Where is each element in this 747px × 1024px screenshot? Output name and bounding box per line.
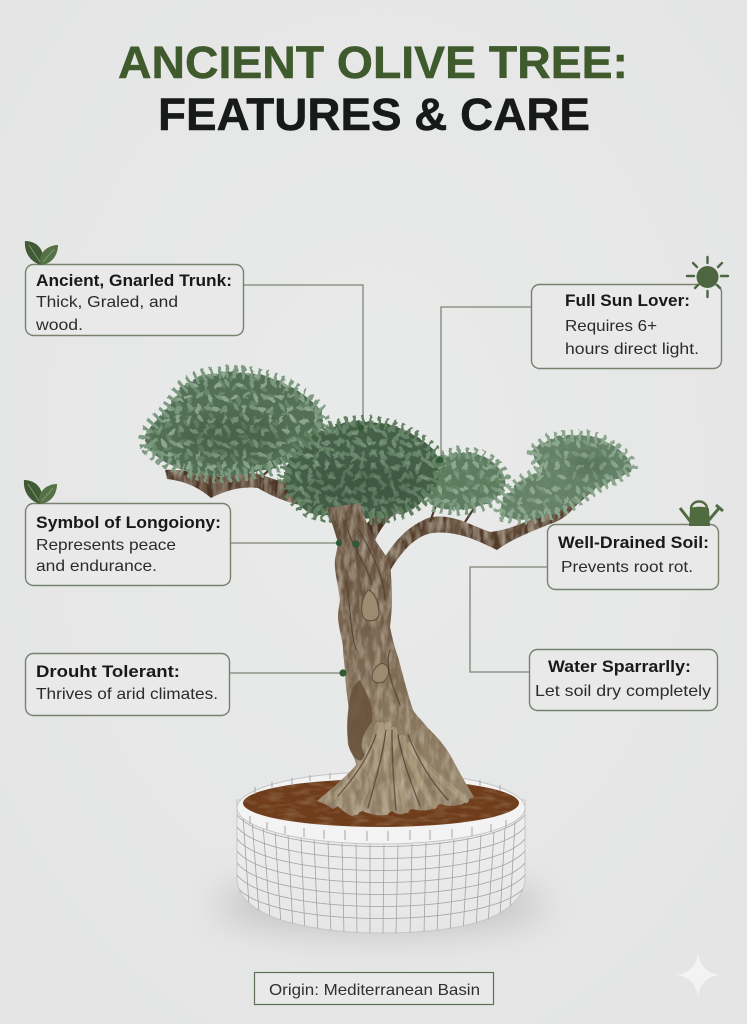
callout: water sparingly	[530, 650, 718, 710]
title: FEATURES & CARE	[158, 89, 590, 140]
branches	[165, 470, 587, 578]
upper stub branch	[365, 497, 408, 540]
connector lines	[230, 285, 547, 673]
callout: symbol of longevity	[26, 504, 230, 586]
planter body	[237, 800, 525, 933]
callout dots	[336, 425, 443, 677]
trunk	[317, 503, 474, 816]
callout: ancient trunk: Ancient, Gnarled Trunk:	[36, 271, 232, 290]
rim ticks	[250, 772, 506, 841]
trunk shaded side	[347, 680, 373, 761]
callout: water sparingly: Water Sparrarlly:	[548, 657, 691, 676]
title: ANCIENT OLIVE TREE:	[118, 37, 628, 88]
trunk root ridges	[328, 725, 466, 812]
callout: ancient trunk: Thick, Graled, and	[36, 294, 178, 311]
title	[118, 37, 628, 140]
callout: well-drained soil: Well-Drained Soil:	[558, 533, 709, 552]
callout: symbol of longevity: Symbol of Longoiony:	[36, 513, 221, 532]
callout: full sun: Full Sun Lover:	[565, 291, 690, 310]
callout: ancient trunk	[26, 264, 244, 336]
twigs	[188, 462, 612, 522]
callout: well-drained soil: Prevents root rot.	[561, 559, 693, 576]
callout: drought tolerant: Drouht Tolerant:	[36, 662, 180, 681]
foliage: olive crown	[145, 372, 631, 520]
crown: far right	[500, 435, 631, 520]
callout: drought tolerant	[26, 654, 230, 716]
foliage shading	[180, 413, 610, 509]
callout: drought tolerant: Thrives of arid climates.	[36, 686, 218, 703]
crown: centre	[284, 421, 439, 519]
callout: ancient trunk: wood.	[35, 317, 83, 334]
icon: watering can	[680, 502, 723, 526]
bark ridges	[338, 520, 448, 810]
icon: leaves	[25, 241, 58, 265]
icon: sun	[687, 257, 728, 297]
callout: well-drained soil	[548, 524, 718, 590]
callout: symbol of longevity: and endurance.	[36, 558, 157, 575]
left main branch	[165, 470, 345, 509]
right main branch	[378, 487, 587, 578]
planter shadow	[216, 877, 546, 933]
sparkle mark	[676, 953, 720, 997]
planter grid	[237, 815, 525, 935]
crown: right of centre	[425, 453, 505, 510]
callout: full sun: Requires 6+	[565, 318, 657, 335]
planter: white mesh fabric pot	[237, 772, 525, 935]
callout: symbol of longevity: Represents peace	[36, 537, 176, 554]
planter rim	[237, 772, 525, 844]
callout: full sun	[532, 284, 722, 368]
crown: left	[145, 372, 323, 476]
trunk knots	[362, 590, 389, 683]
icon: leaves	[24, 480, 57, 504]
callout: water sparingly: Let soil dry completely	[535, 683, 711, 700]
soil	[243, 779, 519, 827]
origin label: Origin: Mediterranean Basin	[269, 982, 480, 999]
callout: full sun: hours direct light.	[565, 341, 699, 358]
origin label	[254, 972, 494, 1004]
